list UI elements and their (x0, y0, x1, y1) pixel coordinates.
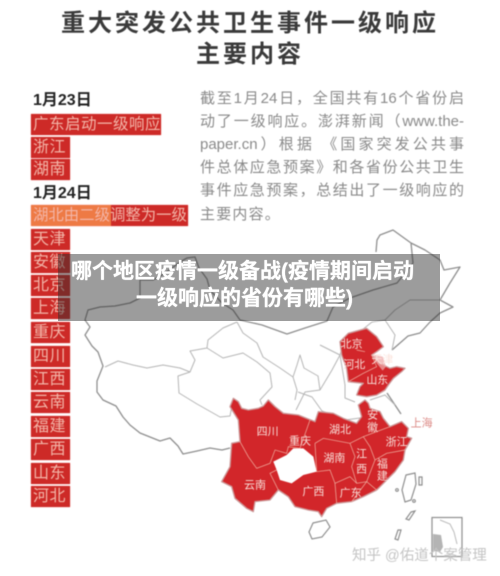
map labels: 浙江 (386, 436, 408, 449)
map labels: 重庆 (289, 434, 311, 448)
tag: Anhui: 安徽 (33, 254, 66, 271)
banner heading: 一级响应的省份有哪些) (136, 287, 353, 310)
tag: Zhejiang (31, 137, 70, 158)
tag: Tianjin: 天津 (33, 231, 66, 248)
text block: description: 主要内容。 (200, 206, 281, 223)
map labels: 安 (367, 408, 378, 422)
tag: Tianjin (31, 229, 70, 250)
tag: Chongqing: 重庆 (33, 324, 66, 341)
map labels: 云南 (244, 478, 266, 491)
title: 主要内容 (196, 41, 304, 68)
panel: provinces timeline (30, 91, 189, 508)
text block: description: 件总体应急预案》和各省份公共卫生 (200, 159, 464, 176)
tag: Chongqing (31, 322, 70, 343)
tag: Shandong: 山东 (33, 465, 66, 482)
tag: Hubei upgrade: 湖北由二级调整为一级 (33, 207, 187, 224)
tag: Hunan (31, 159, 70, 180)
tag: Jiangxi (31, 369, 70, 390)
map: grey province lines (105, 300, 440, 420)
map labels: 河北 (343, 358, 365, 371)
title: 重大突发公共卫生事件一级响应 (61, 10, 439, 37)
map labels: 徽 (367, 420, 378, 434)
tag: Shandong (31, 463, 70, 484)
text block: description (200, 90, 464, 223)
region boundaries (240, 350, 405, 503)
map: grey outer border (85, 230, 460, 454)
tag: Guangxi (31, 439, 70, 460)
map labels: 湖南 (323, 452, 345, 465)
tag: Beijing: 北京 (33, 277, 66, 294)
tag: Shanghai: 上海 (33, 300, 66, 317)
title (61, 10, 439, 68)
tag: Zhejiang: 浙江 (33, 139, 66, 156)
text block: description: 动了一级响应。澎湃新闻（www.the- (200, 113, 464, 130)
banner heading: 哪个地区疫情一级备战(疫情期间启动 (71, 260, 414, 283)
tag: Sichuan: 四川 (33, 348, 66, 365)
map labels: 江 (356, 447, 367, 460)
text block: description: paper.cn）根据 《国家突发公共事 (200, 136, 464, 153)
text block: description: 事件应急预案，总结出了一级响应的 (200, 182, 464, 199)
map labels: 建 (377, 469, 388, 483)
tag: Fujian (31, 416, 70, 437)
region: northern block (340, 328, 405, 397)
overlay banner (58, 254, 440, 321)
map labels: 西 (356, 463, 367, 475)
tag: Beijing (31, 275, 70, 296)
tag: Guangdong: 广东启动一级响应 (33, 116, 161, 133)
tag: Jiangxi: 江西 (33, 371, 66, 388)
date: January 24: 1月24日 (33, 185, 92, 202)
tag: Yunnan (31, 392, 70, 413)
map labels: 上海 (411, 415, 433, 429)
tag: Yunnan: 云南 (33, 394, 66, 411)
tag: Guangxi: 广西 (33, 441, 66, 458)
region: southern block (222, 398, 412, 517)
watermark: 知乎 @佑道个案管理 (352, 546, 487, 564)
map labels: 四川 (257, 426, 279, 438)
tag: Fujian: 福建 (33, 418, 66, 435)
map labels: 北京 (341, 336, 363, 350)
map labels: 天津 (371, 353, 393, 366)
region: Tianjin (373, 355, 386, 371)
map labels: 湖北 (329, 423, 351, 436)
tag: Shanghai (31, 298, 70, 319)
text block: description: 截至1月24日，全国共有16个省份启 (200, 90, 464, 107)
map labels: 广东 (340, 487, 362, 500)
tag: Sichuan (31, 346, 70, 367)
map labels (244, 336, 433, 500)
tag: Hunan: 湖南 (33, 161, 66, 178)
inset: South China Sea (432, 518, 462, 556)
map: Taiwan, Hainan and islands (309, 473, 422, 540)
map labels: 广西 (302, 485, 324, 498)
banner heading (71, 259, 414, 310)
map: highlighted provinces (222, 328, 433, 517)
map labels: 福 (377, 456, 388, 470)
tag: Anhui (31, 252, 70, 273)
map labels: 山东 (366, 373, 388, 386)
date: January 23: 1月23日 (33, 92, 92, 109)
tag: Hebei (31, 486, 70, 507)
region: Guizhou gap (273, 448, 317, 483)
tag: Hebei: 河北 (33, 488, 66, 505)
